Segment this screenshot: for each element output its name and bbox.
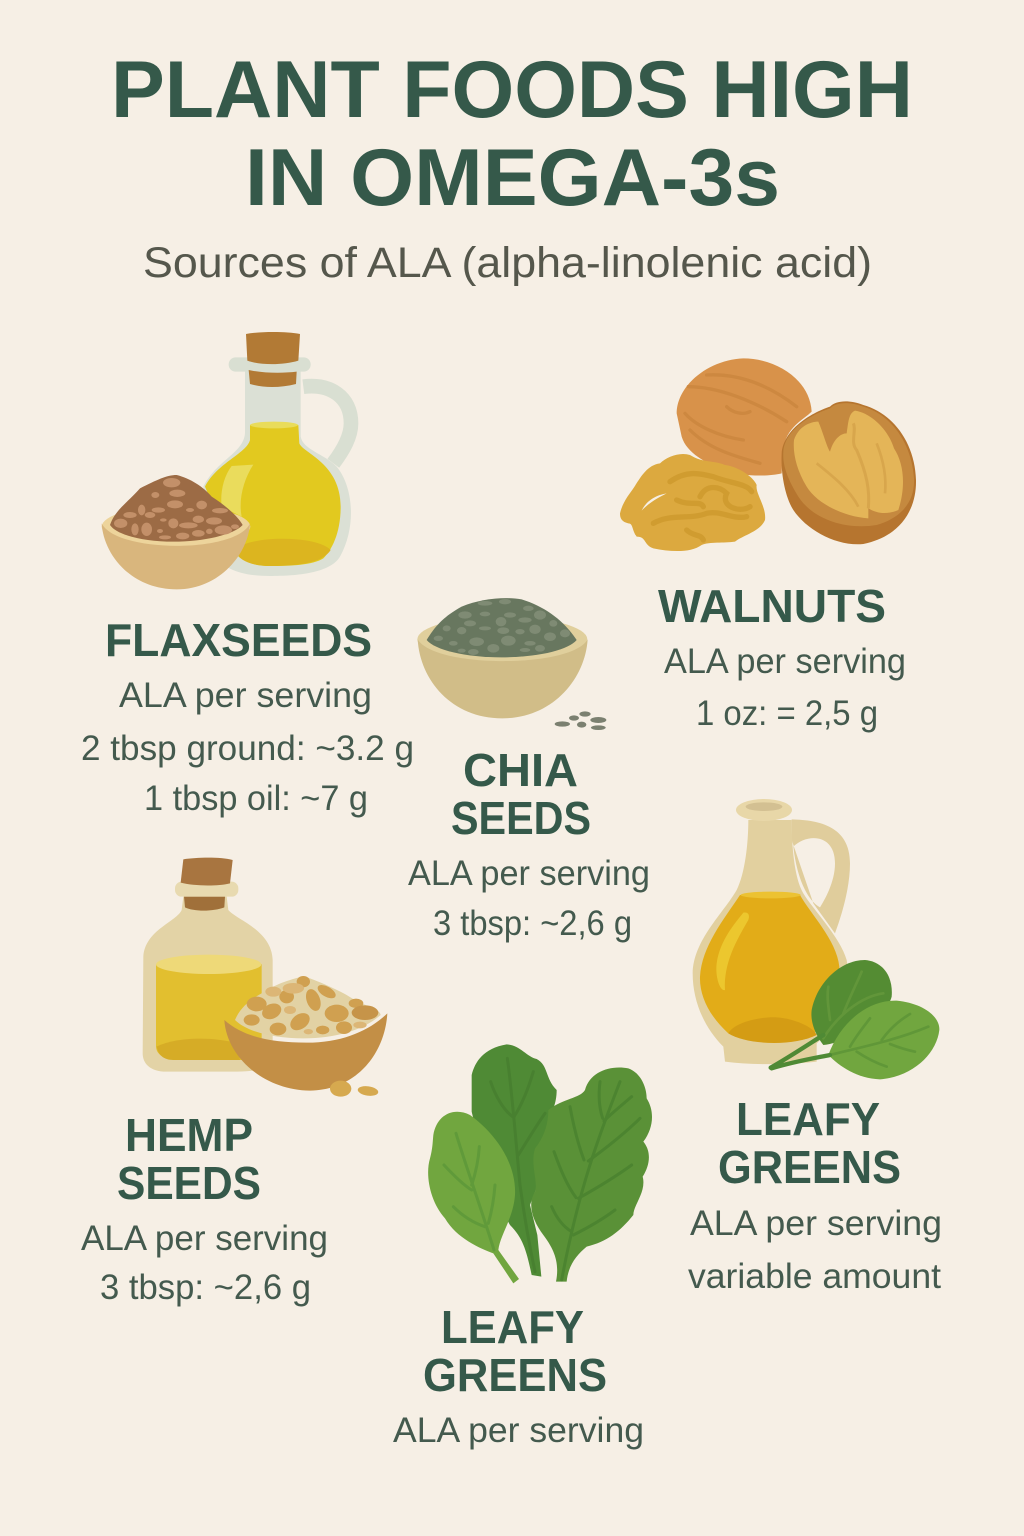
panel: leafy greens right [688, 799, 942, 1296]
panel: hemp seeds [81, 858, 387, 1307]
heading: hemp seeds: HEMP [125, 1109, 253, 1161]
heading: walnuts: WALNUTS [658, 580, 886, 632]
title [111, 45, 913, 223]
icon: flaxseed oil jug [203, 332, 351, 576]
icon: walnuts [620, 358, 916, 551]
icon: bowl of hemp seeds [224, 976, 387, 1097]
panel: walnuts [620, 358, 916, 733]
heading: leafy greens bottom: GREENS [423, 1349, 607, 1401]
panel: flaxseeds [81, 332, 414, 818]
title: PLANT FOODS HIGH [111, 45, 913, 135]
text: leafy greens right values: variable amount [688, 1257, 941, 1296]
panel: leafy greens bottom [393, 1044, 652, 1450]
heading: chia seeds: CHIA [463, 744, 578, 796]
text: walnuts values: 1 oz: = 2,5 g [696, 694, 878, 733]
text: hemp seeds values [81, 1219, 328, 1307]
heading: leafy greens bottom: LEAFY [441, 1301, 584, 1353]
heading: leafy greens right [718, 1093, 901, 1193]
text: flaxseeds values [81, 676, 414, 818]
text: chia seeds values [408, 854, 650, 943]
icon: hemp oil bottle [143, 858, 273, 1072]
text: flaxseeds values: 2 tbsp ground: ~3.2 g [81, 729, 414, 768]
title: IN OMEGA-3s [245, 133, 780, 223]
subtitle: Sources of ALA (alpha-linolenic acid) [143, 239, 872, 287]
text: flaxseeds values: ALA per serving [119, 676, 372, 715]
text: chia seeds values: ALA per serving [408, 854, 650, 893]
text: leafy greens right values: ALA per serving [690, 1204, 942, 1243]
icon: bowl of ground flaxseed [102, 475, 250, 589]
text: walnuts values: ALA per serving [664, 642, 906, 681]
heading: flaxseeds: FLAXSEEDS [105, 614, 372, 666]
text: flaxseeds values: 1 tbsp oil: ~7 g [144, 779, 368, 818]
text: hemp seeds values: ALA per serving [81, 1219, 328, 1258]
text: leafy greens right values [688, 1204, 942, 1296]
text: chia seeds values: 3 tbsp: ~2,6 g [433, 904, 632, 943]
heading: chia seeds [451, 744, 591, 844]
heading: chia seeds: SEEDS [451, 792, 591, 844]
text: leafy greens bottom values: ALA per serving [393, 1411, 644, 1450]
icon: spinach leaves [428, 1044, 652, 1283]
heading: hemp seeds [117, 1109, 261, 1209]
panel: chia seeds [408, 598, 650, 943]
icon: bowl of chia seeds [417, 598, 606, 730]
heading: leafy greens right: GREENS [718, 1141, 901, 1193]
icon: oil jug with spinach leaves [693, 799, 939, 1079]
text: hemp seeds values: 3 tbsp: ~2,6 g [100, 1268, 311, 1307]
heading: leafy greens bottom [423, 1301, 607, 1401]
heading: leafy greens right: LEAFY [736, 1093, 880, 1145]
text: walnuts values [664, 642, 906, 733]
heading: hemp seeds: SEEDS [117, 1157, 261, 1209]
